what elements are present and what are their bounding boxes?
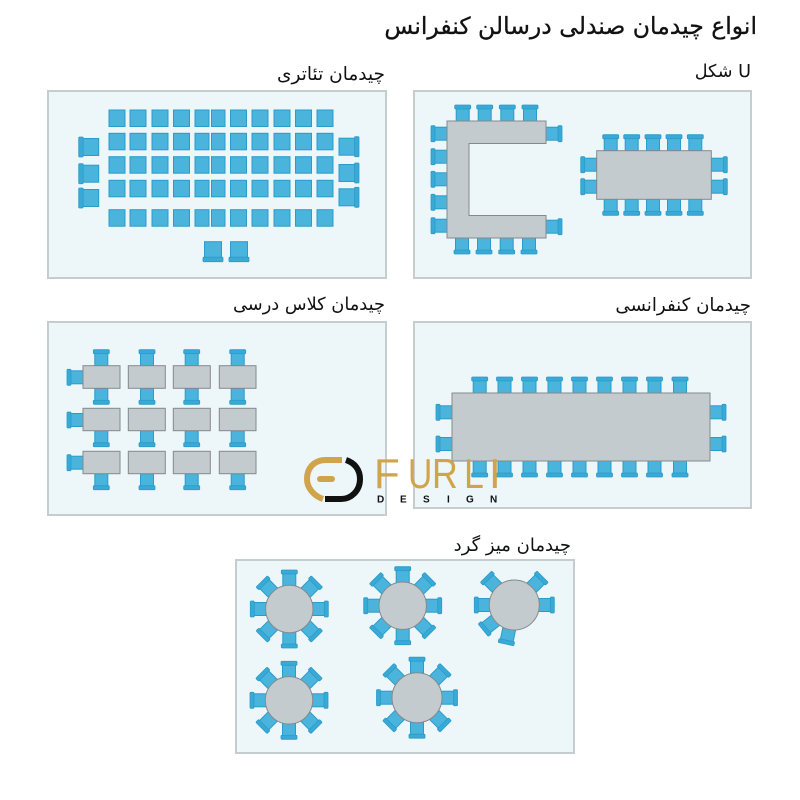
- logo wordmark: U: [408, 452, 432, 498]
- logo mark: [307, 460, 360, 499]
- round table 5: [376, 657, 458, 738]
- logo wordmark: [374, 450, 501, 498]
- U table: [447, 121, 546, 238]
- round table 2: [364, 567, 442, 645]
- heading: round table: چیدمان میز گرد: [454, 534, 571, 556]
- conference chairs: [436, 377, 726, 477]
- heading: conference: چیدمان کنفرانسی: [615, 295, 751, 316]
- front chairs: [203, 242, 249, 262]
- audience seat rows: [109, 110, 333, 226]
- panel: round table layout: [236, 534, 574, 753]
- classroom chairs: [67, 350, 246, 490]
- panel: theatre layout: [48, 64, 386, 278]
- side chairs: [79, 137, 359, 208]
- conference table: [452, 393, 710, 461]
- logo wordmark: L: [464, 451, 484, 498]
- classroom desks: [83, 366, 256, 474]
- rectangular table: [597, 151, 711, 199]
- heading: classroom: چیدمان کلاس درسی: [233, 294, 385, 315]
- panel: conference layout: [414, 295, 751, 508]
- round table 3: [474, 571, 554, 646]
- panel: classroom layout: [48, 294, 386, 515]
- panel: U shape layout: [414, 62, 751, 278]
- rectangular table chairs: [581, 135, 727, 215]
- logo wordmark: F: [374, 450, 400, 497]
- logo subtitle: DESIGN: [377, 494, 497, 506]
- title: انواع چیدمان صندلی درسالن کنفرانس: [384, 12, 757, 40]
- heading: theatre: چیدمان تئاتری: [277, 64, 385, 85]
- U table chairs: [431, 105, 562, 254]
- logo wordmark: I: [489, 450, 501, 497]
- heading: U shape: U شکل: [695, 62, 751, 82]
- logo wordmark: R: [432, 451, 458, 498]
- round table 1: [250, 570, 328, 648]
- round table 4: [250, 661, 328, 739]
- watermark logo: [307, 450, 501, 506]
